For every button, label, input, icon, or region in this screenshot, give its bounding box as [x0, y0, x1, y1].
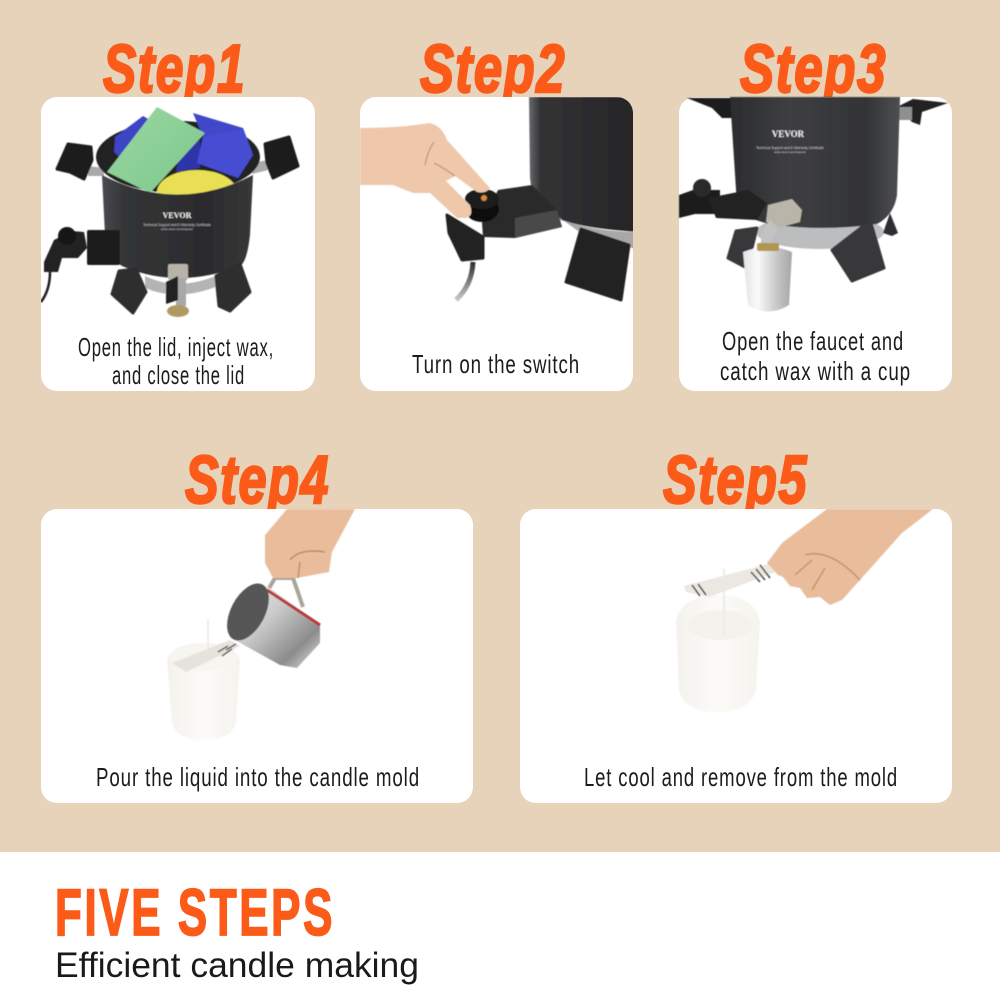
image: pouring into mold: [167, 509, 355, 740]
hand: [360, 123, 490, 218]
candle mold: [167, 643, 240, 740]
pot body: [730, 97, 900, 228]
image: faucet filling a cup: [679, 97, 948, 312]
brand logo text: Technical Support and E-Warranty Certificate: [143, 223, 211, 227]
pot body: [529, 97, 640, 232]
candle mold: [676, 595, 760, 712]
control arm: [679, 190, 720, 218]
caption: step 3: Open the faucet and: [722, 326, 904, 356]
caption: step 1: [78, 332, 274, 390]
base ring: [756, 215, 884, 249]
base ring: [145, 275, 218, 295]
power bracket: [87, 230, 120, 265]
foot: [566, 229, 629, 300]
brand logo text: [756, 129, 824, 154]
card: step 4: [41, 509, 473, 803]
caption: step 2: Turn on the switch: [412, 349, 580, 379]
wick holder: [684, 563, 776, 597]
icon: knob: [468, 204, 499, 223]
panel: step 2: [360, 31, 640, 391]
pot inner rim: [96, 121, 260, 193]
wick holder: [172, 640, 240, 672]
card: step 5: [520, 509, 952, 803]
wax: green: [107, 107, 205, 193]
brand logo text: www.vevor.com/support: [774, 150, 806, 154]
footer background: [0, 852, 1000, 1000]
hand: [265, 509, 355, 578]
left handle: [687, 98, 732, 118]
card: step 3: [679, 97, 952, 391]
panel: footer: [0, 852, 1000, 1000]
wax: blue middle: [176, 140, 200, 172]
card: step 2: [360, 97, 633, 391]
power cord: [41, 272, 50, 302]
pot body: [102, 175, 253, 278]
wick: [207, 620, 209, 662]
panel: step 4: [41, 442, 473, 803]
heading: step 1: Step1: [103, 31, 246, 107]
caption: step 4: Pour the liquid into the candle mold: [96, 762, 420, 792]
image: removing candle from mold: [676, 509, 933, 712]
caption: step 3: [720, 326, 911, 386]
foot right: [216, 264, 250, 311]
subtitle: Efficient candle making: [55, 946, 419, 985]
heading: step 3: Step3: [740, 31, 887, 107]
foot left: [728, 228, 757, 268]
icon: right handle: [265, 137, 298, 178]
heading: step 5: Step5: [663, 442, 808, 518]
brand logo text: [143, 211, 211, 231]
caption: step 3: catch wax with a cup: [720, 356, 911, 386]
foot right: [832, 226, 884, 281]
wax: blue right: [193, 113, 253, 178]
panel: step 3: [679, 31, 952, 391]
brand logo text: Technical Support and E-Warranty Certificate: [756, 146, 824, 150]
heading: step 2: Step2: [420, 31, 566, 107]
brand logo text: VEVOR: [163, 211, 192, 220]
hand: [767, 509, 933, 605]
wax: yellow: [156, 169, 234, 196]
icon: left handle: [57, 144, 92, 179]
pitcher body: [235, 586, 320, 668]
foot left: [112, 269, 146, 313]
faucet: [168, 264, 188, 280]
pitcher opening: [218, 577, 278, 647]
base ring: [559, 217, 633, 249]
caption: step 1: Open the lid, inject wax,: [78, 332, 274, 362]
power cord: [456, 262, 473, 300]
cup: [743, 247, 792, 312]
caption: step 1: and close the lid: [112, 360, 245, 390]
faucet: [766, 199, 802, 228]
control box: [447, 215, 483, 260]
image: hand turning the switch: [360, 97, 640, 300]
heading: step 4: Step4: [185, 442, 330, 518]
brand logo text: www.vevor.com/support: [161, 227, 193, 231]
card: step 1: [41, 97, 315, 391]
image: wax melter with wax blocks: [41, 107, 298, 317]
wax: blue back left: [113, 115, 148, 157]
temperature control: [44, 231, 87, 272]
title: FIVE STEPS: [55, 875, 335, 949]
bracket: [482, 185, 562, 238]
right handle: [897, 99, 948, 125]
brand logo text: VEVOR: [772, 129, 805, 139]
panel: step 1: [41, 31, 315, 391]
pitcher handle: [268, 578, 303, 607]
panel: step 5: [520, 442, 952, 803]
wick: [723, 568, 725, 636]
metal arms: [88, 160, 268, 176]
foot back right: [883, 213, 898, 236]
